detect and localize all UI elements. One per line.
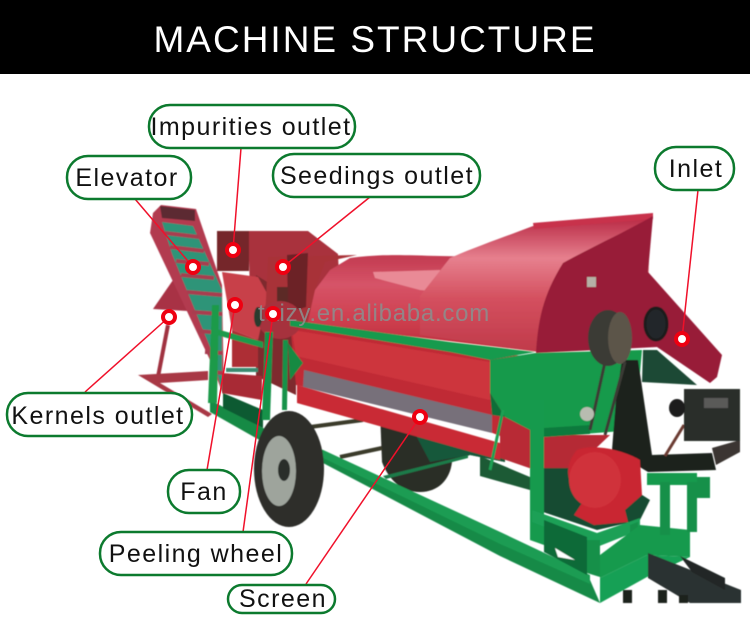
- label: screen: Screen: [239, 585, 327, 613]
- inlet chute underside: [642, 350, 697, 385]
- pointer: kernels outlet: [85, 311, 175, 392]
- label: kernels outlet: [7, 393, 192, 436]
- front wheel: [254, 411, 324, 527]
- rear pipe: [623, 553, 741, 603]
- label: peeling wheel: Peeling wheel: [109, 540, 283, 568]
- machine photo illustration: [138, 205, 741, 603]
- large pulley: [580, 310, 632, 435]
- green main beam: [323, 450, 600, 603]
- dark rear beam: [480, 456, 537, 492]
- frame near end: [208, 305, 323, 463]
- label: seedings outlet: [273, 154, 480, 197]
- platform and stands: [532, 473, 710, 603]
- rear wheel and under-drum frame: [310, 412, 505, 492]
- label: elevator: Elevator: [75, 164, 179, 192]
- label: inlet: Inlet: [669, 155, 723, 183]
- green machine body: [490, 350, 642, 545]
- elevator: [150, 205, 224, 397]
- green stripe: [290, 320, 535, 360]
- pointer: screen: [306, 411, 426, 584]
- label: fan: Fan: [180, 478, 228, 506]
- label: elevator: [67, 156, 191, 199]
- label: impurities outlet: [149, 105, 355, 148]
- header bar: [0, 0, 750, 74]
- label: seedings outlet: Seedings outlet: [280, 162, 474, 190]
- red patch under green body: [500, 390, 535, 470]
- watermark: taizy.en.alibaba.com: [258, 300, 490, 327]
- title: MACHINE STRUCTURE: [153, 19, 597, 60]
- label: kernels outlet: Kernels outlet: [11, 402, 185, 430]
- small flywheel: [645, 308, 667, 340]
- pointer: impurities outlet: [227, 148, 241, 256]
- hopper: [420, 213, 722, 385]
- pointer: peeling wheel: [243, 308, 279, 532]
- drive belts and shaft: [612, 360, 740, 472]
- pointer: fan: [207, 299, 241, 470]
- pointer: elevator: [135, 199, 199, 273]
- pointer: seedings outlet: [277, 197, 370, 273]
- label: fan: [168, 470, 240, 513]
- gearbox: [568, 447, 642, 525]
- label: peeling wheel: [100, 532, 292, 575]
- label: inlet: [655, 147, 734, 190]
- electric motor: [669, 389, 740, 441]
- main drum: [290, 255, 540, 450]
- pointer: inlet: [676, 190, 698, 345]
- elevator support: [138, 280, 212, 417]
- seedings housing: [254, 253, 357, 339]
- label: impurities outlet: Impurities outlet: [150, 113, 352, 141]
- screen panel: [303, 370, 492, 433]
- lower rail: [297, 385, 500, 460]
- impurities box and fan housing: [217, 231, 340, 400]
